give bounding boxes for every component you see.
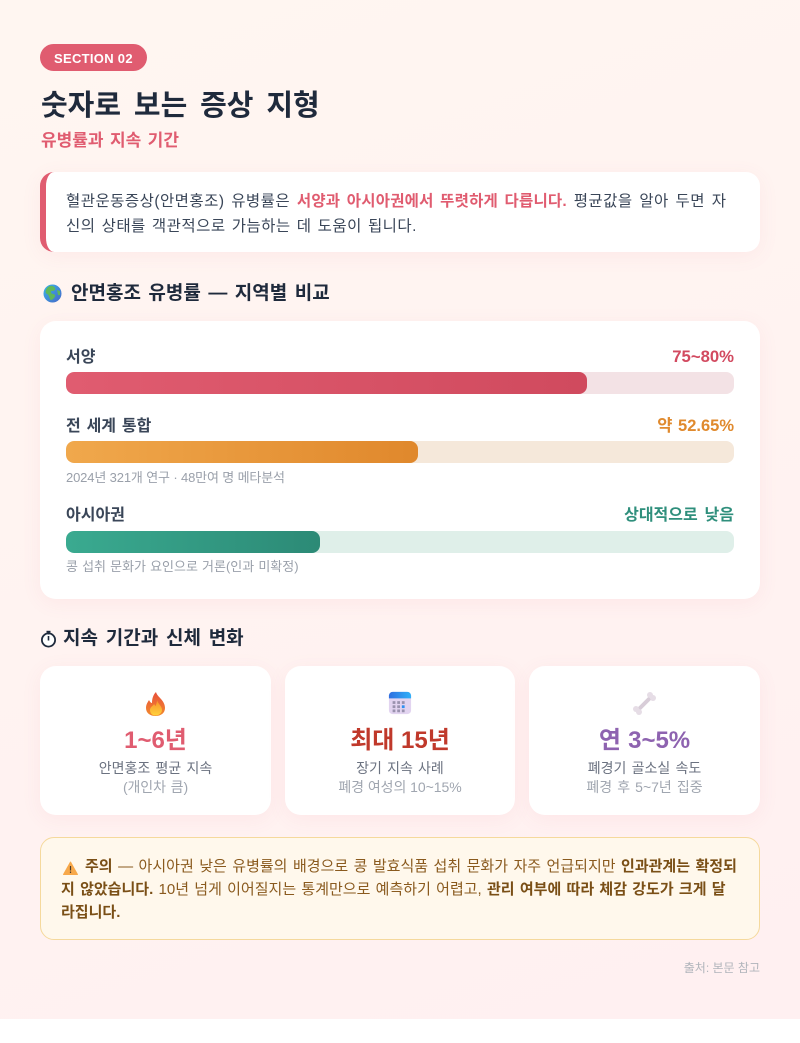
caption: 장기 지속 사례 bbox=[356, 760, 444, 776]
bar: asia bbox=[66, 531, 734, 553]
bar: west bbox=[66, 372, 734, 394]
intro text line 2: 신의 상태를 객관적으로 가늠하는 데 도움이 됩니다. bbox=[66, 218, 417, 235]
stat: 최대 15년 bbox=[350, 727, 450, 754]
card: average duration bbox=[40, 666, 271, 815]
panel: regional bars bbox=[40, 321, 760, 599]
icon: fire bbox=[146, 692, 165, 716]
caption: 폐경기 골소실 속도 bbox=[588, 760, 701, 776]
warning line 3: 라집니다. bbox=[61, 904, 120, 921]
warning line 1: 주의 — 아시아권 낮은 유병률의 배경으로 콩 발효식품 섭취 문화가 자주 언급되지만 인과관계는 확정되 bbox=[85, 858, 737, 875]
label: asia: 아시아권 bbox=[66, 507, 125, 524]
icon: globe bbox=[44, 284, 62, 302]
card: longest duration bbox=[285, 666, 515, 815]
heading text: 지속 기간과 신체 변화 bbox=[63, 628, 244, 649]
caption: 안면홍조 평균 지속 bbox=[99, 760, 212, 776]
sub-caption: (개인차 큼) bbox=[123, 779, 188, 795]
label: west: 서양 bbox=[66, 349, 95, 366]
heading: prevalence bbox=[44, 283, 330, 304]
bar: global bbox=[66, 441, 734, 463]
sub-caption: 폐경 여성의 10~15% bbox=[338, 779, 462, 795]
intro callout bbox=[40, 172, 760, 252]
sub-caption: 폐경 후 5~7년 집중 bbox=[586, 779, 703, 795]
icon: calendar bbox=[388, 692, 412, 714]
note: asia: 콩 섭취 문화가 요인으로 거론(인과 미확정) bbox=[66, 559, 299, 574]
title: 숫자로 보는 증상 지형 bbox=[41, 90, 320, 122]
stat: 1~6년 bbox=[124, 727, 187, 754]
intro text line 1: 혈관운동증상(안면홍조) 유병률은 서양과 아시아권에서 뚜렷하게 다릅니다. 평균값을 알아 두면 자 bbox=[66, 193, 726, 210]
icon: warning bbox=[63, 862, 78, 875]
stat: 연 3~5% bbox=[599, 727, 690, 754]
warning line 2: 지 않았습니다. 10년 넘게 이어질지는 통계만으로 예측하기 어렵고, 관리 여부에 따라 체감 강도가 크게 달 bbox=[61, 881, 726, 898]
section badge: SECTION 02 bbox=[54, 51, 133, 66]
subtitle: 유병률과 지속 기간 bbox=[41, 131, 179, 150]
warning callout bbox=[40, 837, 760, 940]
heading: duration bbox=[41, 628, 244, 649]
value: asia: 상대적으로 낮음 bbox=[624, 507, 734, 524]
label: global: 전 세계 통합 bbox=[66, 418, 151, 435]
icon: stopwatch bbox=[41, 630, 56, 648]
value: west: 75~80% bbox=[672, 347, 734, 366]
section badge bbox=[40, 44, 147, 71]
source note: 출처: 본문 참고 bbox=[684, 961, 760, 975]
card: bone loss bbox=[529, 666, 760, 815]
value: global: 약 52.65% bbox=[657, 417, 734, 435]
icon: bone bbox=[633, 692, 656, 715]
note: global: 2024년 321개 연구 · 48만여 명 메타분석 bbox=[66, 470, 285, 484]
heading text: 안면홍조 유병률 — 지역별 비교 bbox=[71, 283, 330, 304]
